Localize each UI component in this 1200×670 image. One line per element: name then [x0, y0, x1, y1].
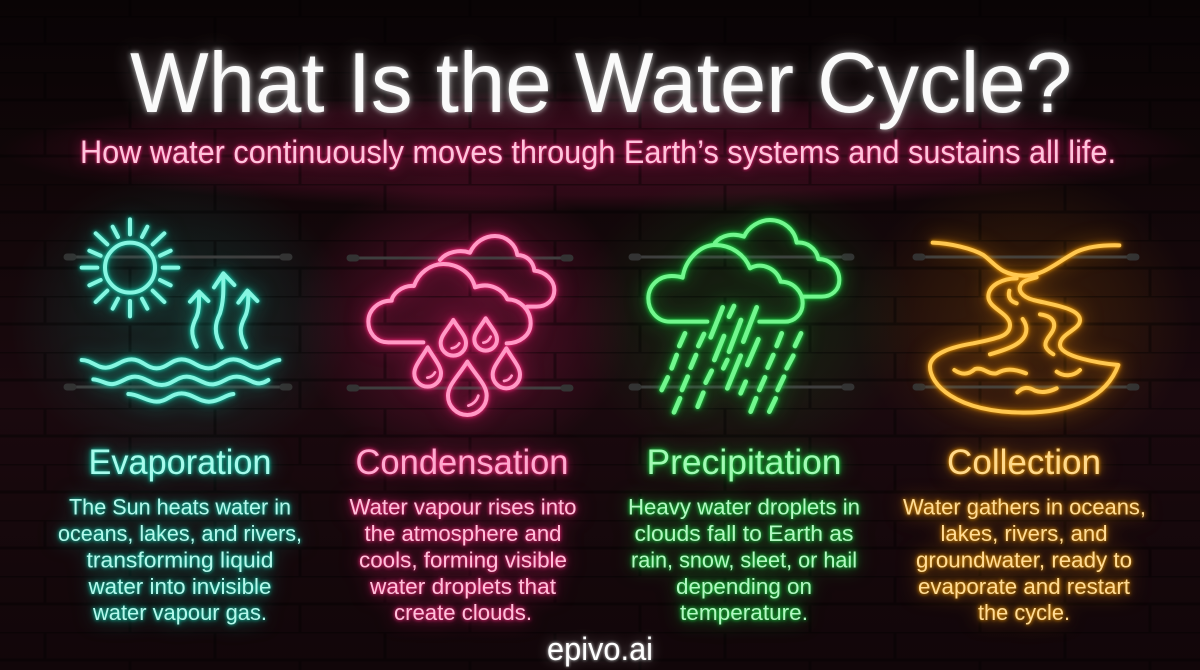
heading: Condensation: Condensation	[356, 443, 568, 482]
icon: clouds and rain	[648, 220, 839, 412]
text block: collection: evaporate and restart	[918, 574, 1131, 599]
text block: evaporation: The Sun heats water in	[69, 494, 291, 520]
text block: collection: groundwater, ready to	[916, 548, 1132, 572]
icon: clouds and droplets	[368, 236, 554, 415]
title: What Is the Water Cycle?	[130, 36, 1072, 131]
heading: Precipitation: Precipitation	[646, 443, 842, 482]
text block: precipitation	[628, 494, 860, 625]
text block: precipitation: clouds fall to Earth as	[634, 521, 854, 546]
text block: collection: Water gathers in oceans,	[903, 494, 1146, 520]
heading: Collection: Collection	[947, 443, 1101, 482]
text block: condensation: Water vapour rises into	[350, 494, 576, 520]
text block: condensation: water droplets that	[369, 574, 557, 599]
text block: precipitation: temperature.	[680, 600, 808, 625]
icon: mounting rods condensation	[349, 258, 570, 388]
text block: precipitation: Heavy water droplets in	[628, 494, 860, 520]
subtitle: How water continuously moves through Earth’s systems and sustains all life.	[80, 134, 1116, 170]
panel: collection	[903, 243, 1146, 625]
icon: mounting rods precipitation	[631, 257, 851, 387]
heading: Evaporation: Evaporation	[88, 443, 272, 482]
icon: mounting rods collection	[915, 257, 1136, 387]
panel: condensation	[349, 236, 576, 625]
text block: evaporation: oceans, lakes, and rivers,	[58, 521, 302, 546]
panel: precipitation	[628, 220, 860, 625]
text block: evaporation: water into invisible	[88, 574, 272, 599]
icon: sun, vapour arrows and waves	[82, 219, 279, 402]
text block: evaporation: transforming liquid	[86, 548, 274, 572]
text block: condensation: cools, forming visible	[359, 548, 567, 572]
icon: river flowing into a lake	[930, 243, 1119, 413]
text block: evaporation: water vapour gas.	[92, 600, 267, 625]
text block: precipitation: depending on	[676, 574, 812, 599]
text block: collection: lakes, rivers, and	[940, 521, 1108, 546]
footer brand: epivo.ai	[547, 631, 653, 667]
text block: collection	[903, 494, 1146, 625]
text block: condensation: the atmosphere and	[364, 521, 562, 546]
text block: condensation	[350, 494, 576, 625]
text block: condensation: create clouds.	[394, 600, 532, 625]
panel: evaporation	[58, 219, 302, 625]
text block: collection: the cycle.	[978, 600, 1070, 625]
text block: evaporation	[58, 494, 302, 625]
text block: precipitation: rain, snow, sleet, or hail	[631, 548, 857, 572]
icon: mounting rods evaporation	[65, 257, 290, 387]
